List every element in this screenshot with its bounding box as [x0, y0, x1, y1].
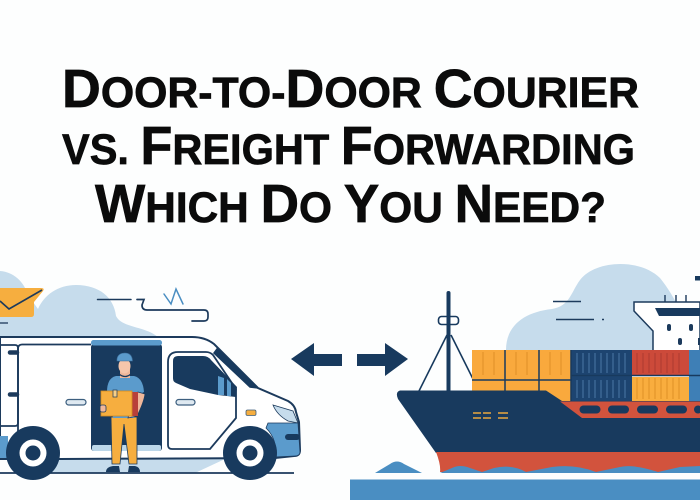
rear bumper [0, 436, 8, 458]
containers [472, 350, 700, 401]
bumper [266, 423, 300, 457]
title: VS. FREIGHT FORWARDING [62, 116, 635, 176]
side panel [18, 344, 91, 459]
courier van scene [0, 271, 300, 480]
open door interior [91, 344, 162, 451]
headlight [273, 405, 298, 423]
mast [419, 293, 479, 391]
ground line [0, 472, 294, 474]
rear door panel [0, 345, 18, 426]
rear hinges [10, 352, 17, 394]
left arrow [291, 343, 342, 376]
portholes [580, 406, 700, 414]
cab window [173, 356, 237, 397]
motion lines [98, 289, 208, 321]
side handle [66, 400, 86, 405]
door sill [92, 445, 161, 451]
title: WHICH DO YOU NEED? [95, 174, 606, 234]
envelope icon [0, 288, 44, 323]
cab handle [176, 400, 195, 405]
hull [397, 390, 700, 453]
courier [100, 353, 145, 472]
cloud behind van [0, 271, 225, 473]
right arrow [357, 343, 408, 376]
cab door [168, 352, 236, 449]
van body [0, 337, 300, 459]
front wheel [223, 426, 277, 480]
ship scene [350, 264, 700, 500]
motion lines [553, 302, 604, 320]
rear wheel [6, 426, 60, 480]
door top rail [91, 340, 162, 346]
red keel [436, 452, 700, 472]
indicator [246, 410, 256, 416]
title: DOOR-TO-DOOR COURIER [62, 59, 639, 119]
cab window reflection [218, 376, 231, 396]
water [350, 480, 700, 500]
hull stripe [560, 402, 700, 418]
title [62, 59, 639, 234]
superstructure [634, 276, 700, 352]
waves [375, 462, 700, 473]
hull markings [473, 413, 508, 418]
cloud behind ship [506, 264, 680, 350]
windshield [214, 349, 258, 388]
